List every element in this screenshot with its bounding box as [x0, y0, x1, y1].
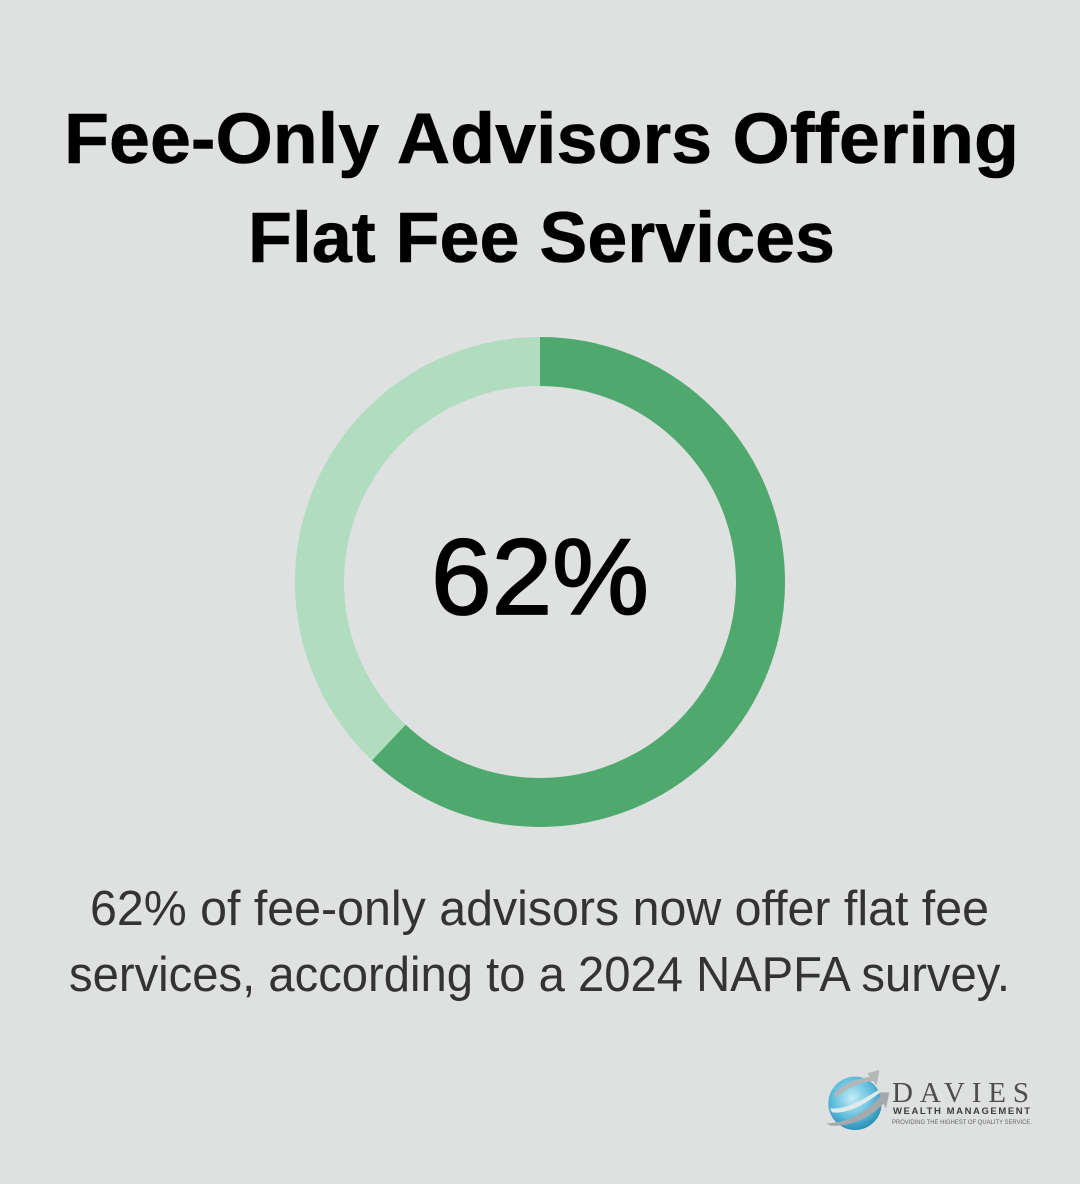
description text: 62% of fee-only advisors now offer flat fee [90, 882, 989, 936]
logo: Davies Wealth Management [826, 1070, 1032, 1130]
logo wordmark: DAVIES [892, 1077, 1029, 1109]
description text [69, 882, 1010, 1002]
donut value arc [320, 362, 760, 802]
donut chart: 62% [320, 362, 760, 802]
title [64, 100, 1019, 278]
icon: globe with arrows [826, 1070, 889, 1130]
donut centre value: 62% [431, 516, 649, 637]
title: Fee-Only Advisors Offering [64, 100, 1019, 179]
logo tagline: PROVIDING THE HIGHEST OF QUALITY SERVICE. [892, 1119, 1032, 1126]
description text: services, according to a 2024 NAPFA survey. [69, 948, 1010, 1002]
logo subtitle: WEALTH MANAGEMENT [893, 1106, 1030, 1117]
title: Flat Fee Services [248, 199, 835, 278]
donut track [320, 362, 760, 802]
